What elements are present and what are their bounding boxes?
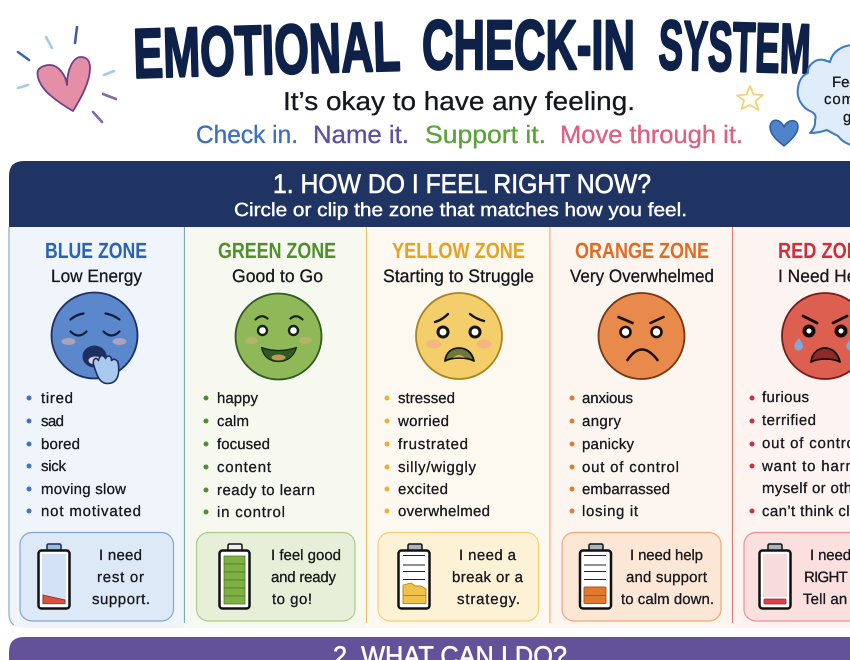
title (132, 6, 812, 93)
word list: embarrassed (582, 481, 670, 498)
card: battery note: I need a (459, 547, 517, 564)
icon: low battery (580, 544, 611, 608)
word list: sick (41, 458, 66, 475)
sublabel: Very Overwhelmed (570, 266, 714, 286)
title: CHECK-IN (422, 6, 635, 84)
heading: GREEN ZONE (218, 238, 336, 263)
section 1 header (9, 161, 850, 227)
heading: BLUE ZONE (45, 238, 147, 263)
panel: yellow zone (367, 227, 550, 628)
sublabel: Low Energy (51, 266, 142, 286)
card: battery note: I feel good (271, 547, 341, 564)
card: battery note: strategy. (457, 591, 520, 608)
word list (750, 389, 850, 520)
word list (204, 390, 315, 521)
card: battery note (196, 532, 355, 621)
icon: blue heart (770, 120, 798, 146)
card: battery note: to go! (272, 591, 312, 608)
sublabel: Good to Go (232, 266, 323, 286)
word list: bored (41, 436, 80, 453)
word list: calm (217, 413, 249, 430)
section 1 panel: how do I feel (9, 161, 850, 628)
panel: orange zone (550, 227, 732, 628)
word list: focused (217, 436, 270, 453)
tagline: Name it. (313, 121, 409, 149)
word list: excited (398, 481, 448, 498)
card: battery note: support. (92, 591, 150, 608)
word list: happy (217, 390, 258, 407)
word list: terrified (762, 412, 816, 429)
card: battery note: I need (99, 547, 142, 564)
card: battery note: rest or (97, 569, 144, 586)
icon: worried face (416, 293, 502, 379)
word list: anxious (582, 390, 633, 407)
panel: red zone (733, 227, 850, 628)
word list (570, 390, 679, 520)
card: battery note: and support (626, 569, 708, 586)
word list: losing it (582, 503, 639, 520)
word list: frustrated (398, 436, 468, 453)
word list: angry (582, 413, 622, 430)
subtitle: It’s okay to have any feeling. (283, 86, 635, 116)
word list: in control (217, 504, 285, 521)
icon: half-low battery (398, 544, 430, 608)
icon: happy face (236, 294, 322, 380)
icon: star (737, 86, 763, 110)
card: battery note: and ready (271, 569, 336, 586)
sublabel: Starting to Struggle (383, 266, 534, 286)
word list (384, 390, 490, 520)
card: battery note (378, 532, 538, 621)
heading: YELLOW ZONE (392, 238, 525, 263)
word list: out of control (582, 459, 679, 476)
panel: blue zone (9, 227, 184, 628)
callout: thought cloud (798, 45, 850, 146)
card: battery note: break or a (452, 569, 524, 586)
icon: crying angry face (782, 293, 850, 379)
word list: sad (41, 413, 64, 430)
card: battery note (20, 532, 174, 621)
word list: moving slow (41, 481, 126, 498)
icon: full battery (220, 544, 250, 608)
tagline: Check in. (196, 121, 298, 149)
icon: heart with rays (18, 27, 116, 122)
word list: tired (41, 390, 73, 407)
icon: frowning face (598, 293, 684, 379)
word list: content (217, 459, 272, 476)
word list: furious (762, 389, 809, 406)
icon: empty battery (760, 544, 790, 608)
panel: green zone (185, 227, 366, 628)
word list: panicky (582, 436, 634, 453)
title: EMOTIONAL (132, 7, 401, 93)
card: battery note: to calm down. (621, 591, 714, 608)
tagline (196, 121, 743, 149)
card: battery note (562, 532, 721, 621)
icon: low battery (38, 544, 70, 608)
word list: silly/wiggly (398, 459, 476, 476)
word list: overwhelmed (398, 503, 490, 520)
icon: yawning face (52, 292, 138, 384)
card: battery note: I need help (630, 547, 703, 564)
section 1 header: Circle or clip the zone that matches how you feel. (234, 200, 687, 221)
word list: stressed (398, 390, 455, 407)
word list: ready to learn (217, 482, 315, 499)
word list: worried (397, 413, 449, 430)
heading: ORANGE ZONE (575, 238, 709, 263)
tagline: Support it. (425, 121, 546, 149)
word list (26, 390, 141, 520)
tagline: Move through it. (560, 121, 743, 149)
card: battery note (744, 532, 850, 621)
section 1 header: 1. HOW DO I FEEL RIGHT NOW? (273, 169, 651, 199)
word list: not motivated (41, 503, 141, 520)
section 2 header (9, 637, 850, 660)
